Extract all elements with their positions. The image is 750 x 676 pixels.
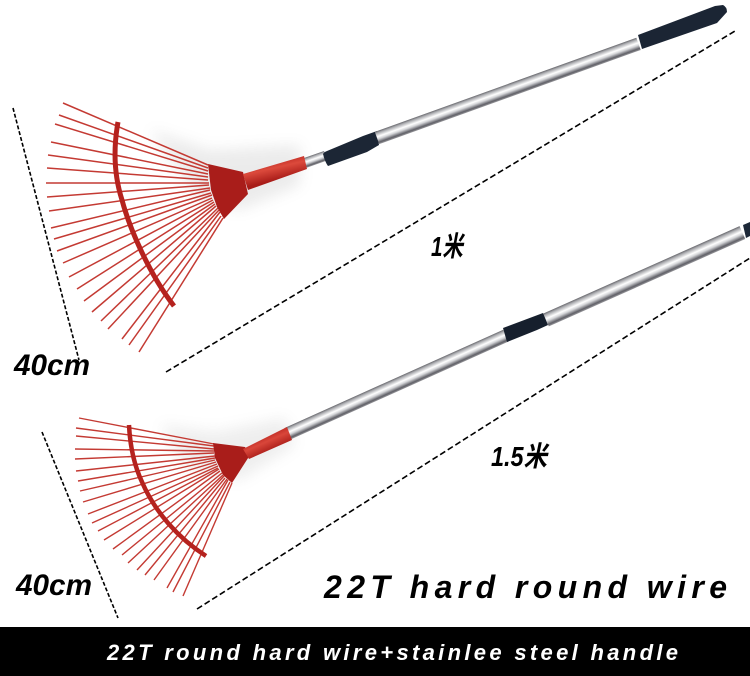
dashed line: 1.5 metre length	[197, 258, 750, 609]
dashed line: lower rake width	[42, 432, 118, 618]
upper handle collar and small tube	[303, 131, 379, 168]
bottom banner	[0, 627, 750, 676]
lower rake cross bar	[129, 425, 206, 556]
label: 1 metre: 1米	[431, 231, 465, 262]
label: 1.5 metre: 1.5米	[491, 441, 549, 472]
lower handle collar	[503, 313, 548, 342]
label: upper width 40cm: 40cm	[13, 349, 90, 382]
lower steel tube outer	[543, 226, 745, 326]
lower rake head	[213, 443, 250, 483]
upper rake tines	[46, 103, 223, 352]
banner text: 22T round hard wire+stainlee steel handle	[106, 640, 678, 665]
upper steel tube	[375, 38, 641, 144]
label: lower width 40cm: 40cm	[15, 569, 92, 602]
upper rake soft shadow	[150, 130, 300, 210]
upper rake head	[208, 164, 248, 219]
lower handle grip end	[743, 222, 750, 238]
upper handle grip	[638, 5, 727, 49]
lower rake tines	[75, 418, 232, 596]
heading: 22T hard round wire: 22T hard round wire	[323, 569, 727, 605]
upper rake 1 metre	[46, 5, 727, 352]
lower rake 1.5 metre	[75, 222, 750, 596]
lower rake neck	[243, 427, 292, 459]
dashed line: upper rake width	[13, 108, 79, 360]
lower rake soft shadow	[160, 418, 295, 480]
upper rake neck	[243, 156, 307, 190]
dashed line: 1 metre length	[166, 31, 735, 372]
lower steel tube inner	[284, 330, 509, 440]
upper rake cross bar	[115, 122, 174, 306]
